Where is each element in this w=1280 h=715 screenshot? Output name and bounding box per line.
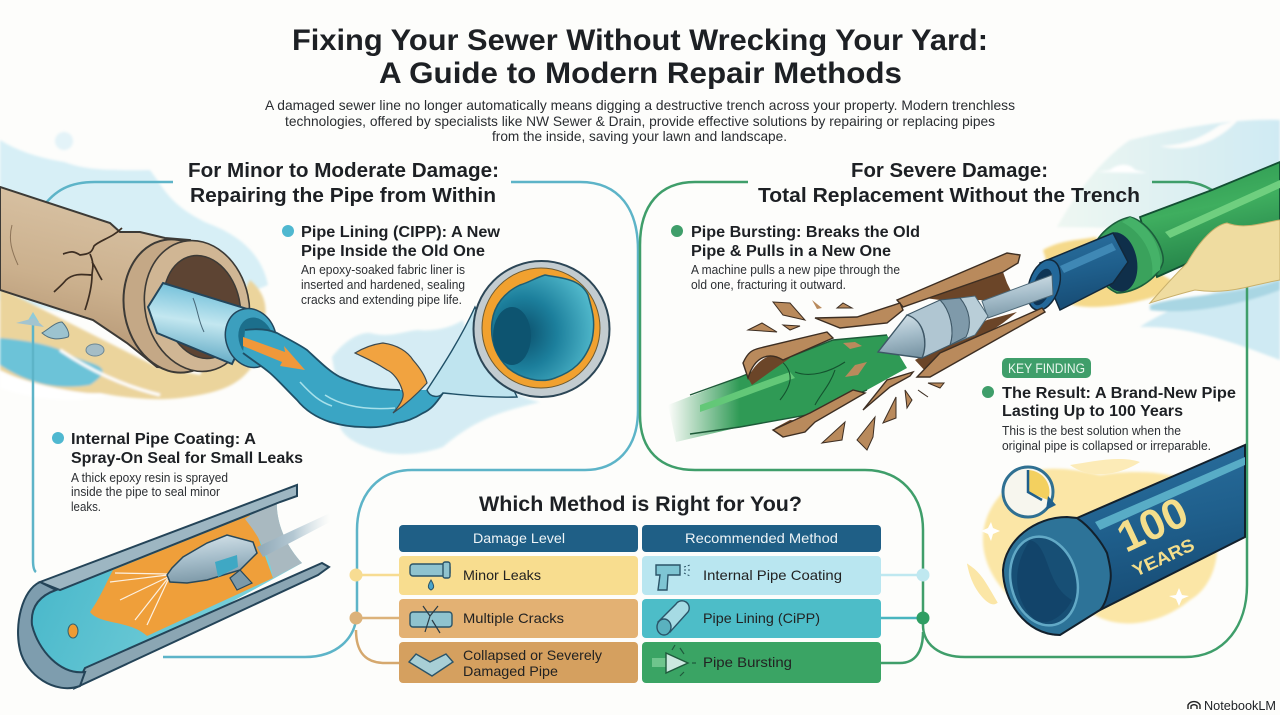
spray gun xyxy=(167,535,257,590)
fractured shards xyxy=(748,300,944,450)
title xyxy=(292,24,988,90)
stones xyxy=(16,318,104,356)
green pipe leaving the burst xyxy=(668,335,907,442)
text: pipe lining: inserted and hardened, sealing xyxy=(301,278,465,292)
text: pipe lining: Pipe Inside the Old One xyxy=(301,243,485,260)
callout: key finding: original pipe is collapsed or irreparable. xyxy=(1002,439,1211,453)
row: minor leaks: Internal Pipe Coating xyxy=(703,567,842,583)
decorative left sand and water xyxy=(0,280,266,400)
text: pipe lining: An epoxy-soaked fabric liner is xyxy=(301,263,465,277)
illustration: cracked old pipe with liner xyxy=(0,187,285,381)
text: pipe lining: Pipe Lining (CIPP): A New xyxy=(301,224,501,241)
bullet xyxy=(52,432,64,444)
icon: leaking pipe xyxy=(410,562,450,590)
text: internal pipe coating xyxy=(52,431,303,514)
badge xyxy=(1002,358,1091,378)
icon: cracked pipe xyxy=(410,606,452,633)
text: internal pipe coating: leaks. xyxy=(71,500,101,514)
text: internal pipe coating: Internal Pipe Coating: A xyxy=(71,431,256,448)
icon: bursting head xyxy=(652,645,696,676)
icon: spray gun xyxy=(656,565,692,590)
text: pipe bursting: A machine pulls a new pipe through the xyxy=(691,263,900,277)
connectors: method column xyxy=(881,568,930,663)
table header: Recommended Method xyxy=(685,530,838,546)
heading: severe damage: Total Replacement Without the Trench xyxy=(758,185,1140,207)
row: minor leaks: Minor Leaks xyxy=(463,567,541,583)
shell interior xyxy=(748,272,1017,435)
bullet xyxy=(982,386,994,398)
text: pipe bursting xyxy=(671,224,920,292)
text: internal pipe coating: A thick epoxy resin is sprayed xyxy=(71,471,228,485)
title: A Guide to Modern Repair Methods xyxy=(379,57,902,90)
text: pipe bursting: Pipe Bursting: Breaks the Old xyxy=(691,224,920,241)
clock icon xyxy=(1003,467,1056,517)
callout: key finding: Lasting Up to 100 Years xyxy=(1002,403,1183,420)
heading: which method: Which Method is Right for You? xyxy=(479,492,802,516)
illustration: pipe bursting xyxy=(668,162,1280,450)
callout: key finding: The Result: A Brand-New Pipe xyxy=(1002,385,1236,402)
row: collapsed pipe xyxy=(399,642,881,683)
row: collapsed pipe: Pipe Bursting xyxy=(703,654,792,670)
text: pipe bursting: Pipe & Pulls in a New One xyxy=(691,243,891,260)
green shell chips xyxy=(843,342,867,377)
heading: severe damage: For Severe Damage: xyxy=(851,160,1048,182)
text: pipe lining xyxy=(282,224,501,307)
heading: minor to moderate damage: For Minor to Moderate Damage: xyxy=(188,160,499,182)
panel: minor to moderate damage outline xyxy=(27,182,638,657)
sand over pipe xyxy=(1150,220,1280,303)
intro paragraph xyxy=(265,97,1015,144)
icon: pipe xyxy=(657,601,689,635)
heading: severe damage xyxy=(758,160,1140,207)
row: minor leaks xyxy=(399,556,881,595)
heading: minor to moderate damage xyxy=(188,160,499,207)
row: collapsed pipe: Damaged Pipe xyxy=(463,663,558,679)
row: multiple cracks: Multiple Cracks xyxy=(463,610,564,626)
callout: key finding xyxy=(982,358,1236,453)
illustration: spray coating pipe xyxy=(18,485,330,688)
intro paragraph: from the inside, saving your lawn and landscape. xyxy=(492,128,787,144)
table: damage level vs recommended method xyxy=(399,525,881,683)
illustration: 100 years pipe xyxy=(970,445,1245,635)
intro paragraph: A damaged sewer line no longer automatically means digging a destructive trench across your property. Modern trenchless xyxy=(265,97,1015,113)
decorative left water wash xyxy=(0,130,268,330)
row: collapsed pipe: Collapsed or Severely xyxy=(463,647,602,663)
connectors: damage column xyxy=(350,568,399,663)
heading: minor to moderate damage: Repairing the Pipe from Within xyxy=(190,185,496,207)
illustration: flowing liner ribbon and cross section xyxy=(243,261,610,454)
callout: key finding: This is the best solution when the xyxy=(1002,424,1181,438)
illustration: 100 years pipe: YEARS xyxy=(1129,535,1198,581)
logo: NotebookLM: NotebookLM xyxy=(1204,698,1276,713)
blue sleeve xyxy=(1022,233,1128,314)
text: pipe bursting: old one, fracturing it outward. xyxy=(691,278,846,292)
text: internal pipe coating: Spray-On Seal for Small Leaks xyxy=(71,450,303,467)
row: multiple cracks: Pipe Lining (CiPP) xyxy=(703,610,820,626)
decorative right wash xyxy=(1043,120,1280,360)
illustration: 100 years pipe: 100 xyxy=(1110,488,1195,562)
bullet xyxy=(282,225,294,237)
icon: collapsed pipe xyxy=(409,654,453,676)
intro paragraph: technologies, offered by specialists like NW Sewer & Drain, provide effective solutions by repairing or replacing pipes xyxy=(285,113,995,129)
table header xyxy=(399,525,881,552)
broken shell pieces xyxy=(743,253,1045,437)
bursting head xyxy=(878,275,1053,358)
table header: Damage Level xyxy=(473,530,565,546)
bullet xyxy=(671,225,683,237)
callout: key finding: KEY FINDING xyxy=(1008,361,1085,376)
title: Fixing Your Sewer Without Wrecking Your Yard: xyxy=(292,24,988,57)
text: internal pipe coating: inside the pipe to seal minor xyxy=(71,485,220,499)
text: pipe lining: cracks and extending pipe life. xyxy=(301,293,462,307)
row: multiple cracks xyxy=(399,599,881,638)
new green pipe section xyxy=(1092,162,1280,295)
panel: severe damage outline xyxy=(640,182,1247,657)
